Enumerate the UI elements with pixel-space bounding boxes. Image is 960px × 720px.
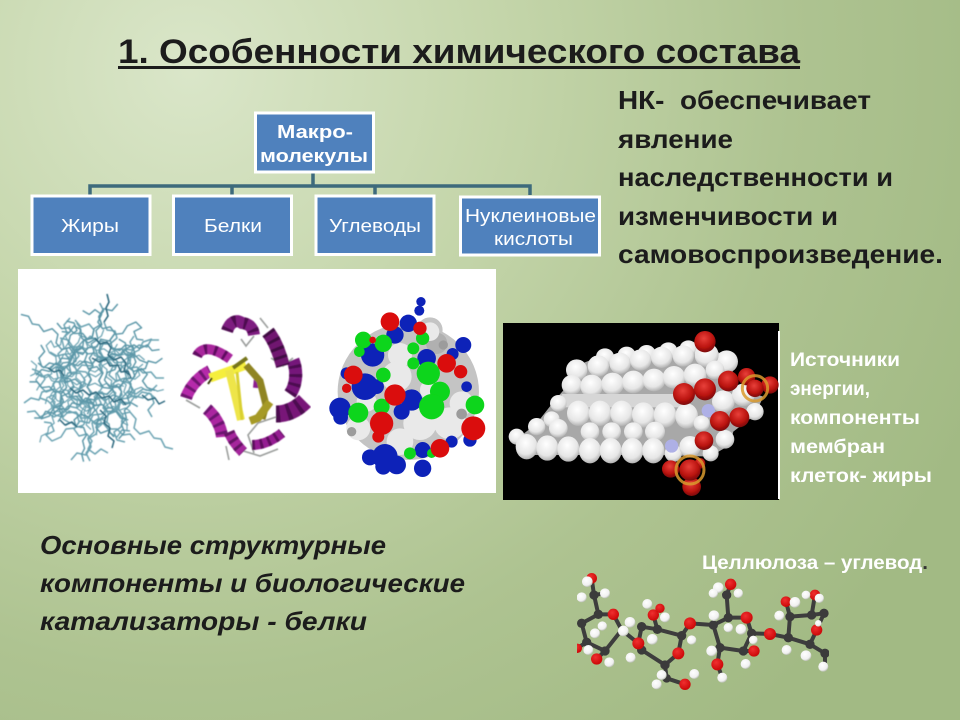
box: proteins: Белки — [204, 215, 262, 236]
text: nucleic acid function: изменчивости и — [618, 201, 838, 231]
yellow sheets — [210, 365, 246, 378]
protein: ribbon model — [186, 318, 305, 460]
panel: lipid molecule — [503, 323, 780, 500]
text: nucleic acid function: явление — [617, 124, 733, 154]
text: nucleic acid function: НК- обеспечивает — [618, 85, 871, 115]
cellulose molecule — [573, 573, 830, 690]
box: nucleic acids — [460, 197, 600, 255]
chart connectors — [90, 172, 530, 195]
box: proteins — [174, 196, 292, 254]
protein: space-filling model — [329, 297, 485, 477]
text: lipid function: мембран — [790, 437, 885, 458]
ribbon coils — [186, 318, 293, 460]
text: protein function: Основные структурные — [40, 530, 386, 560]
caption: cellulose: Целлюлоза – углевод . — [702, 553, 928, 574]
title: 1. Особенности химического состава — [118, 33, 801, 71]
text: lipid function — [790, 350, 932, 487]
phosphate rings — [742, 376, 768, 401]
red oxygen spheres — [662, 331, 779, 496]
text: lipid function: компоненты — [790, 408, 920, 429]
white divider edge — [778, 331, 780, 499]
oxygen atoms — [573, 573, 822, 690]
box: carbohydrates: Углеводы — [329, 215, 421, 236]
lipid body — [520, 345, 763, 457]
text: protein function — [40, 530, 465, 636]
text: lipid function: клеток- жиры — [790, 466, 932, 487]
hydrogen atoms — [577, 576, 828, 689]
carbon atoms — [577, 590, 830, 683]
box: macromolecules — [256, 113, 374, 172]
org chart: macromolecules — [32, 113, 600, 255]
protein: stick model — [21, 294, 173, 462]
text: nucleic acid function — [617, 85, 943, 269]
box: nucleic acids: Нуклеиновые — [465, 205, 596, 226]
text: nucleic acid function: самовоспроизведение. — [618, 239, 943, 269]
blue nitrogen — [702, 404, 715, 417]
box: macromolecules: молекулы — [260, 146, 368, 166]
text: protein function: катализаторы - белки — [40, 606, 367, 636]
box: carbohydrates — [316, 196, 434, 254]
bonds — [577, 578, 825, 684]
panel: protein structures — [18, 269, 496, 493]
text: lipid function: энергии, — [790, 379, 870, 400]
text: nucleic acid function: наследственности и — [618, 162, 893, 192]
box: nucleic acids: кислоты — [494, 228, 573, 249]
text: lipid function: Источники — [790, 350, 900, 371]
box: macromolecules: Макро- — [277, 122, 353, 142]
box: fats: Жиры — [61, 215, 119, 236]
text: protein function: компоненты и биологические — [40, 568, 465, 598]
white hydrocarbon spheres — [509, 340, 764, 463]
box: fats — [32, 196, 150, 254]
